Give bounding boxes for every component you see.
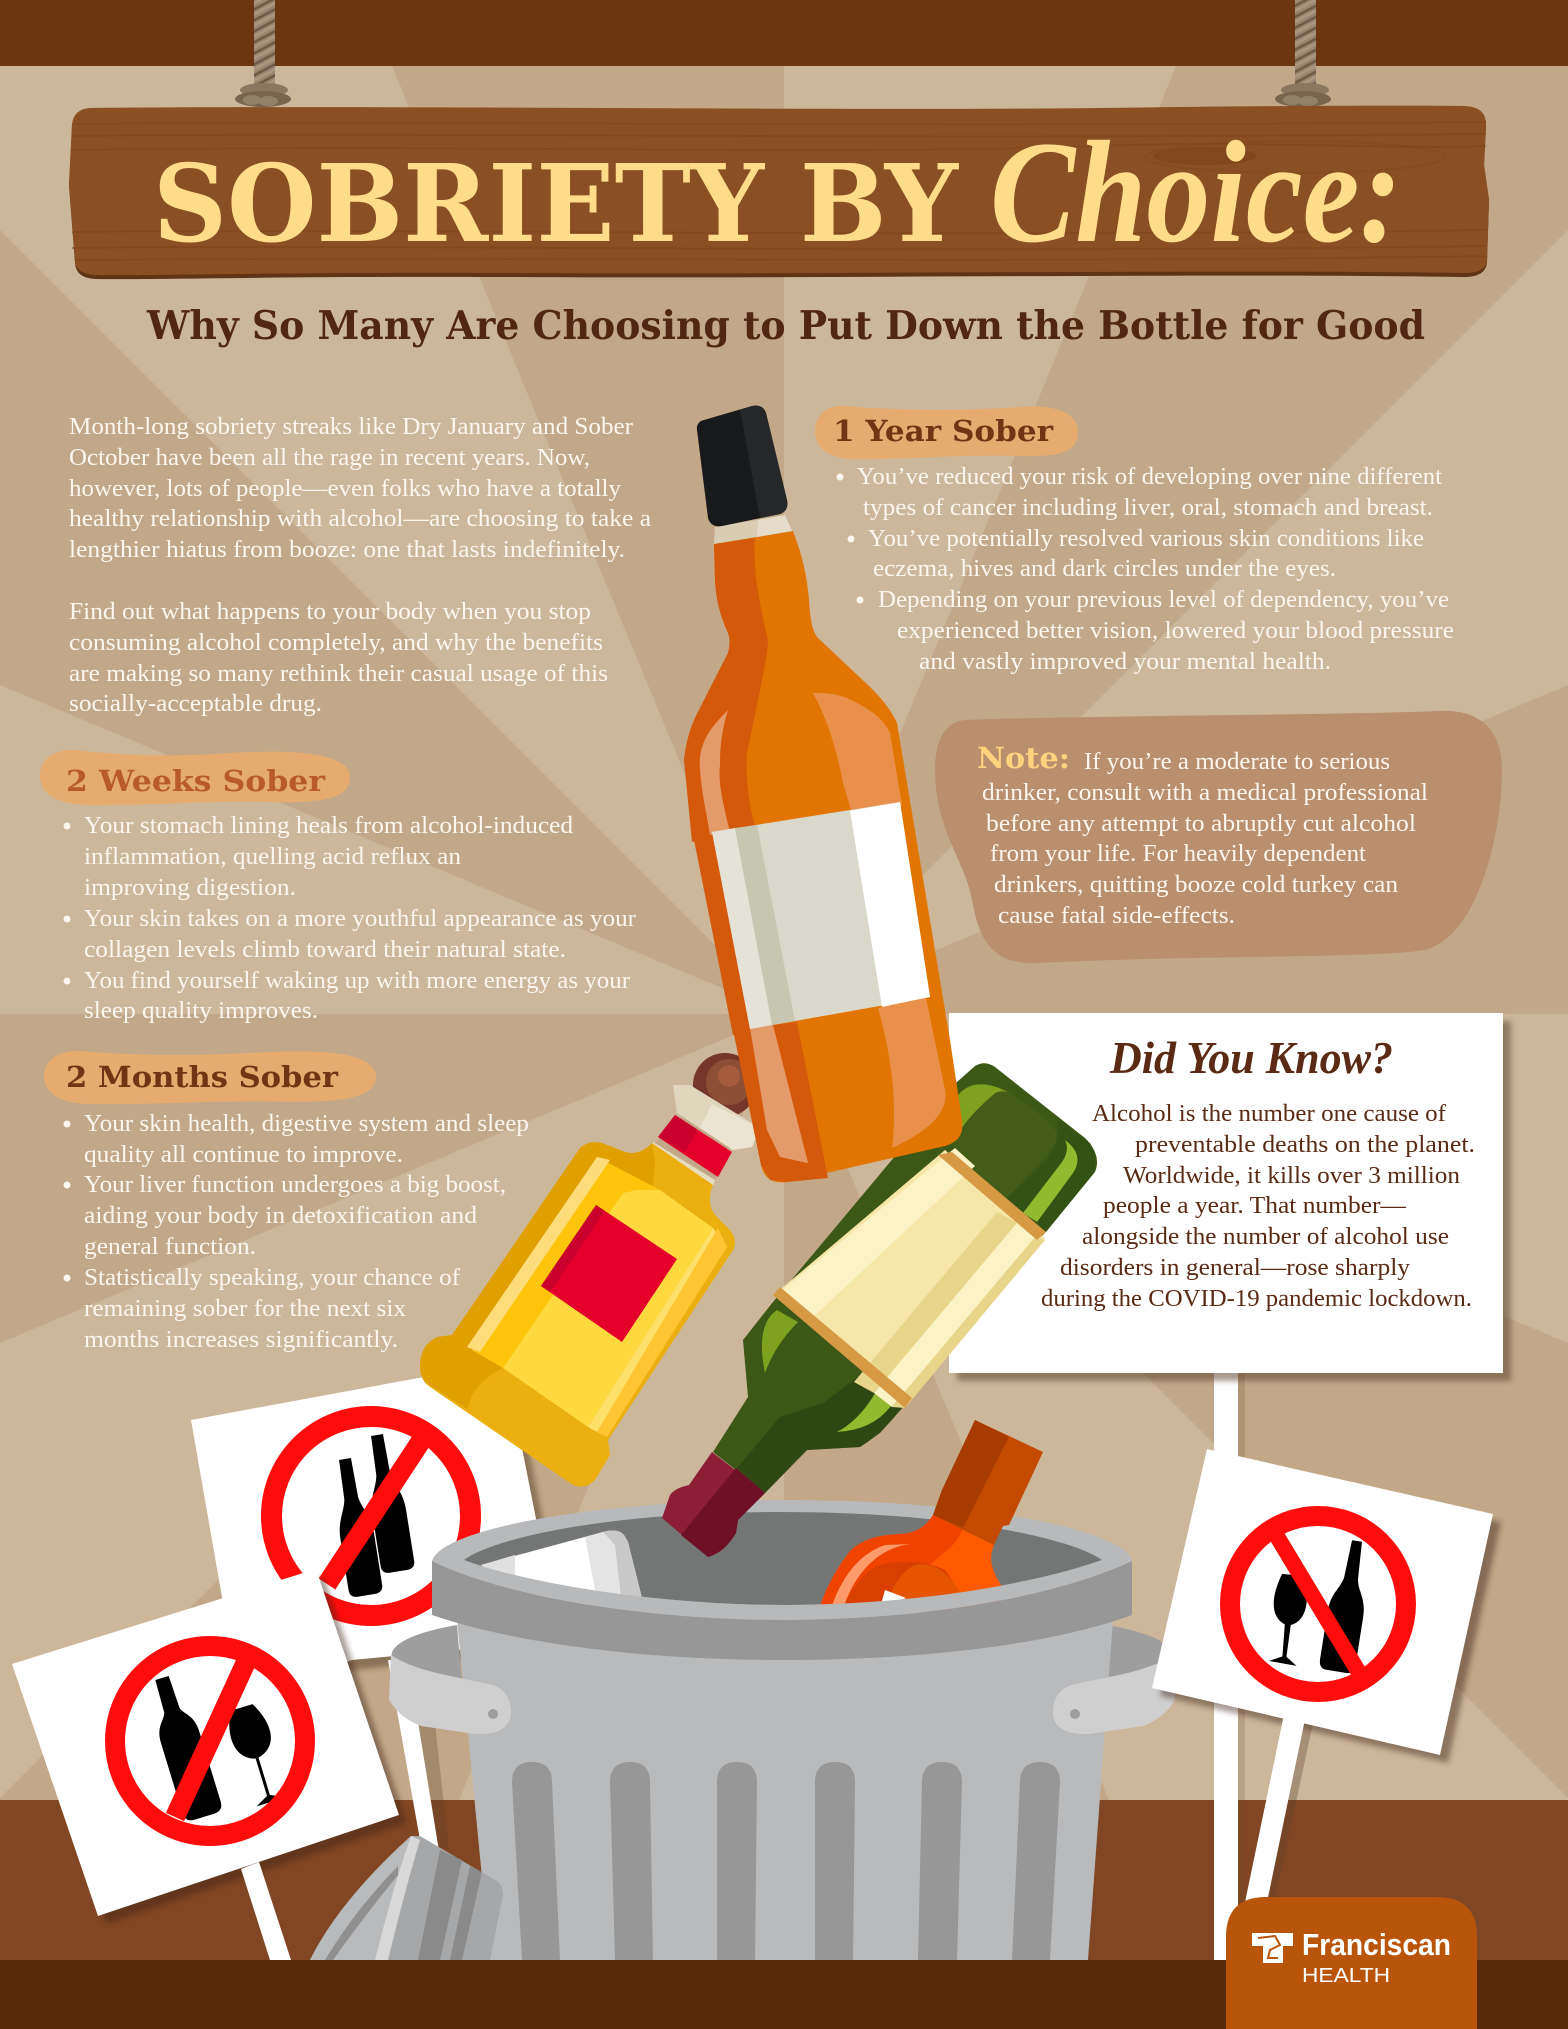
list: 2 weeks sober: sleep quality improves. bbox=[84, 998, 318, 1024]
did you know text: people a year. That number— bbox=[1103, 1193, 1407, 1219]
bottom band bbox=[0, 1960, 1568, 2029]
list: 2 weeks sober: Your stomach lining heals from alcohol-induced bbox=[84, 813, 573, 839]
icon: bottle bbox=[1319, 1538, 1375, 1674]
right sign: bottle and glass prohibited bbox=[1152, 1449, 1501, 1960]
did you know text: alongside the number of alcohol use bbox=[1082, 1224, 1449, 1250]
list: 2 months sober: general function. bbox=[84, 1234, 256, 1260]
green wine bottle bbox=[662, 1063, 1097, 1557]
trash can bbox=[389, 1500, 1175, 1960]
heading: 1 year sober bbox=[815, 406, 1078, 459]
title: SOBRIETY BY bbox=[153, 142, 960, 267]
intro text: Find out what happens to your body when you stop bbox=[69, 599, 591, 625]
sign post bbox=[1250, 1700, 1318, 1960]
bottle label bbox=[541, 1205, 677, 1342]
can front handles bbox=[389, 1655, 1175, 1734]
table band bbox=[0, 1800, 1568, 1960]
did you know text bbox=[1041, 1032, 1475, 1312]
icon: bottle bbox=[143, 1672, 224, 1823]
list: 2 weeks sober: inflammation, quelling acid reflux an bbox=[84, 844, 461, 870]
note panel: from your life. For heavily dependent bbox=[990, 841, 1366, 867]
wooden title sign bbox=[69, 106, 1489, 279]
icon: two bottles bbox=[328, 1432, 415, 1598]
fallen cup bbox=[310, 1836, 503, 1960]
wine label bbox=[775, 1150, 1045, 1405]
did you know text: Did You Know? bbox=[1109, 1032, 1393, 1083]
note panel: before any attempt to abruptly cut alcohol bbox=[986, 811, 1416, 837]
icon: prohibition ring bbox=[1230, 1516, 1406, 1692]
title: Choice: bbox=[990, 111, 1402, 273]
note panel: If you’re a moderate to serious bbox=[1084, 749, 1390, 775]
front-left sign: bottle and glass prohibited bbox=[12, 1569, 407, 1960]
intro text: Month-long sobriety streaks like Dry January and Sober bbox=[69, 414, 633, 440]
list: 1 year sober: You’ve reduced your risk of developing over nine different bbox=[857, 464, 1442, 490]
logo cross bbox=[1252, 1933, 1293, 1963]
intro text: however, lots of people—even folks who have a totally bbox=[69, 476, 621, 502]
wine cap bbox=[662, 1452, 765, 1557]
heading: 2 months sober bbox=[44, 1051, 376, 1104]
list: 2 weeks sober: improving digestion. bbox=[84, 875, 296, 901]
list: 1 year sober bbox=[836, 464, 1454, 675]
icon: wine glass bbox=[1267, 1573, 1309, 1666]
cork bbox=[693, 1053, 757, 1117]
bottle label bbox=[712, 802, 930, 1029]
top band bbox=[0, 0, 1568, 66]
intro text: October have been all the rage in recent years. Now, bbox=[69, 445, 590, 471]
rope right bbox=[1275, 0, 1331, 107]
did you know text: Alcohol is the number one cause of bbox=[1092, 1101, 1446, 1127]
did you know text: disorders in general—rose sharply bbox=[1060, 1255, 1410, 1281]
can rim back bbox=[432, 1500, 1132, 1625]
heading: 2 weeks sober: 2 Weeks Sober bbox=[66, 764, 326, 798]
can ribs bbox=[512, 1762, 1060, 1960]
bottle neck bbox=[673, 1085, 760, 1150]
bottle cap bbox=[697, 406, 787, 526]
can interior bbox=[464, 1512, 1102, 1605]
intro text: socially-acceptable drug. bbox=[69, 691, 322, 717]
bottle body bbox=[420, 1142, 735, 1487]
list: 2 months sober: Your liver function undergoes a big boost, bbox=[84, 1172, 506, 1198]
note panel bbox=[935, 711, 1502, 963]
list: 1 year sober: Depending on your previous level of dependency, you’ve bbox=[878, 587, 1449, 613]
can front rim bbox=[432, 1560, 1132, 1660]
list: 1 year sober: You’ve potentially resolved various skin conditions like bbox=[868, 526, 1424, 552]
note panel: drinker, consult with a medical professional bbox=[982, 780, 1428, 806]
did you know panel bbox=[949, 1013, 1511, 1381]
list: 1 year sober: types of cancer including liver, oral, stomach and breast. bbox=[863, 495, 1433, 521]
crumpled paper in can bbox=[481, 1531, 645, 1610]
can body bbox=[457, 1620, 1113, 1960]
logo badge: Franciscan bbox=[1302, 1927, 1451, 1962]
list: 2 weeks sober: collagen levels climb toward their natural state. bbox=[84, 937, 566, 963]
intro text: are making so many rethink their casual usage of this bbox=[69, 661, 608, 687]
intro text: lengthier hiatus from booze: one that lasts indefinitely. bbox=[69, 537, 625, 563]
did you know text: Worldwide, it kills over 3 million bbox=[1123, 1163, 1460, 1189]
title bbox=[153, 111, 1402, 273]
rope left bbox=[235, 0, 291, 107]
icon: prohibition ring bbox=[272, 1416, 470, 1616]
list: 1 year sober: experienced better vision, lowered your blood pressure bbox=[897, 618, 1454, 644]
did you know text: preventable deaths on the planet. bbox=[1135, 1132, 1475, 1158]
back sign: two bottles prohibited bbox=[191, 1362, 568, 1708]
yellow whisky bottle bbox=[420, 1053, 760, 1487]
note panel: Note: bbox=[977, 741, 1070, 775]
list: 2 months sober: aiding your body in detoxification and bbox=[84, 1203, 477, 1229]
subtitle: Why So Many Are Choosing to Put Down the Bottle for Good bbox=[146, 303, 1425, 349]
sign post bbox=[241, 1862, 291, 1960]
can back handles bbox=[391, 1625, 1173, 1684]
icon: prohibition ring bbox=[115, 1646, 305, 1836]
list: 1 year sober: eczema, hives and dark circles under the eyes. bbox=[873, 556, 1336, 582]
bottle collar bbox=[714, 515, 792, 544]
list: 2 months sober: Statistically speaking, your chance of bbox=[84, 1265, 460, 1291]
heading: 2 months sober: 2 Months Sober bbox=[66, 1060, 339, 1094]
list: 2 months sober bbox=[64, 1111, 529, 1353]
large amber bottle bbox=[684, 406, 962, 1182]
sign post: back sign bbox=[388, 1660, 449, 1851]
list: 2 months sober: months increases significantly. bbox=[84, 1327, 398, 1353]
list: 2 months sober: remaining sober for the next six bbox=[84, 1296, 406, 1322]
list: 2 months sober: Your skin health, digestive system and sleep bbox=[84, 1111, 529, 1137]
heading: 2 weeks sober bbox=[40, 750, 350, 805]
bottle glass bbox=[684, 531, 962, 1182]
did you know text: during the COVID-19 pandemic lockdown. bbox=[1041, 1286, 1472, 1312]
list: 2 weeks sober bbox=[64, 813, 636, 1024]
note panel: drinkers, quitting booze cold turkey can bbox=[994, 872, 1398, 898]
list: 2 weeks sober: You find yourself waking up with more energy as your bbox=[84, 968, 630, 994]
intro text bbox=[69, 414, 651, 717]
logo badge bbox=[1226, 1897, 1477, 2029]
highlights bbox=[958, 1084, 1008, 1130]
intro text: healthy relationship with alcohol—are choosing to take a bbox=[69, 506, 651, 532]
sign post: did you know bbox=[1214, 1373, 1245, 1960]
orange bottle in can bbox=[818, 1420, 1043, 1612]
note panel: cause fatal side-effects. bbox=[998, 903, 1235, 929]
central panel bbox=[950, 1092, 1057, 1198]
intro text: consuming alcohol completely, and why the benefits bbox=[69, 630, 603, 656]
list: 2 months sober: quality all continue to improve. bbox=[84, 1142, 403, 1168]
shaded side bbox=[737, 1373, 905, 1493]
icon: wine glass bbox=[223, 1701, 290, 1808]
list: 1 year sober: and vastly improved your mental health. bbox=[919, 649, 1331, 675]
heading: 1 year sober: 1 Year Sober bbox=[833, 414, 1054, 448]
logo badge: HEALTH bbox=[1302, 1965, 1390, 1987]
list: 2 weeks sober: Your skin takes on a more youthful appearance as your bbox=[84, 906, 636, 932]
